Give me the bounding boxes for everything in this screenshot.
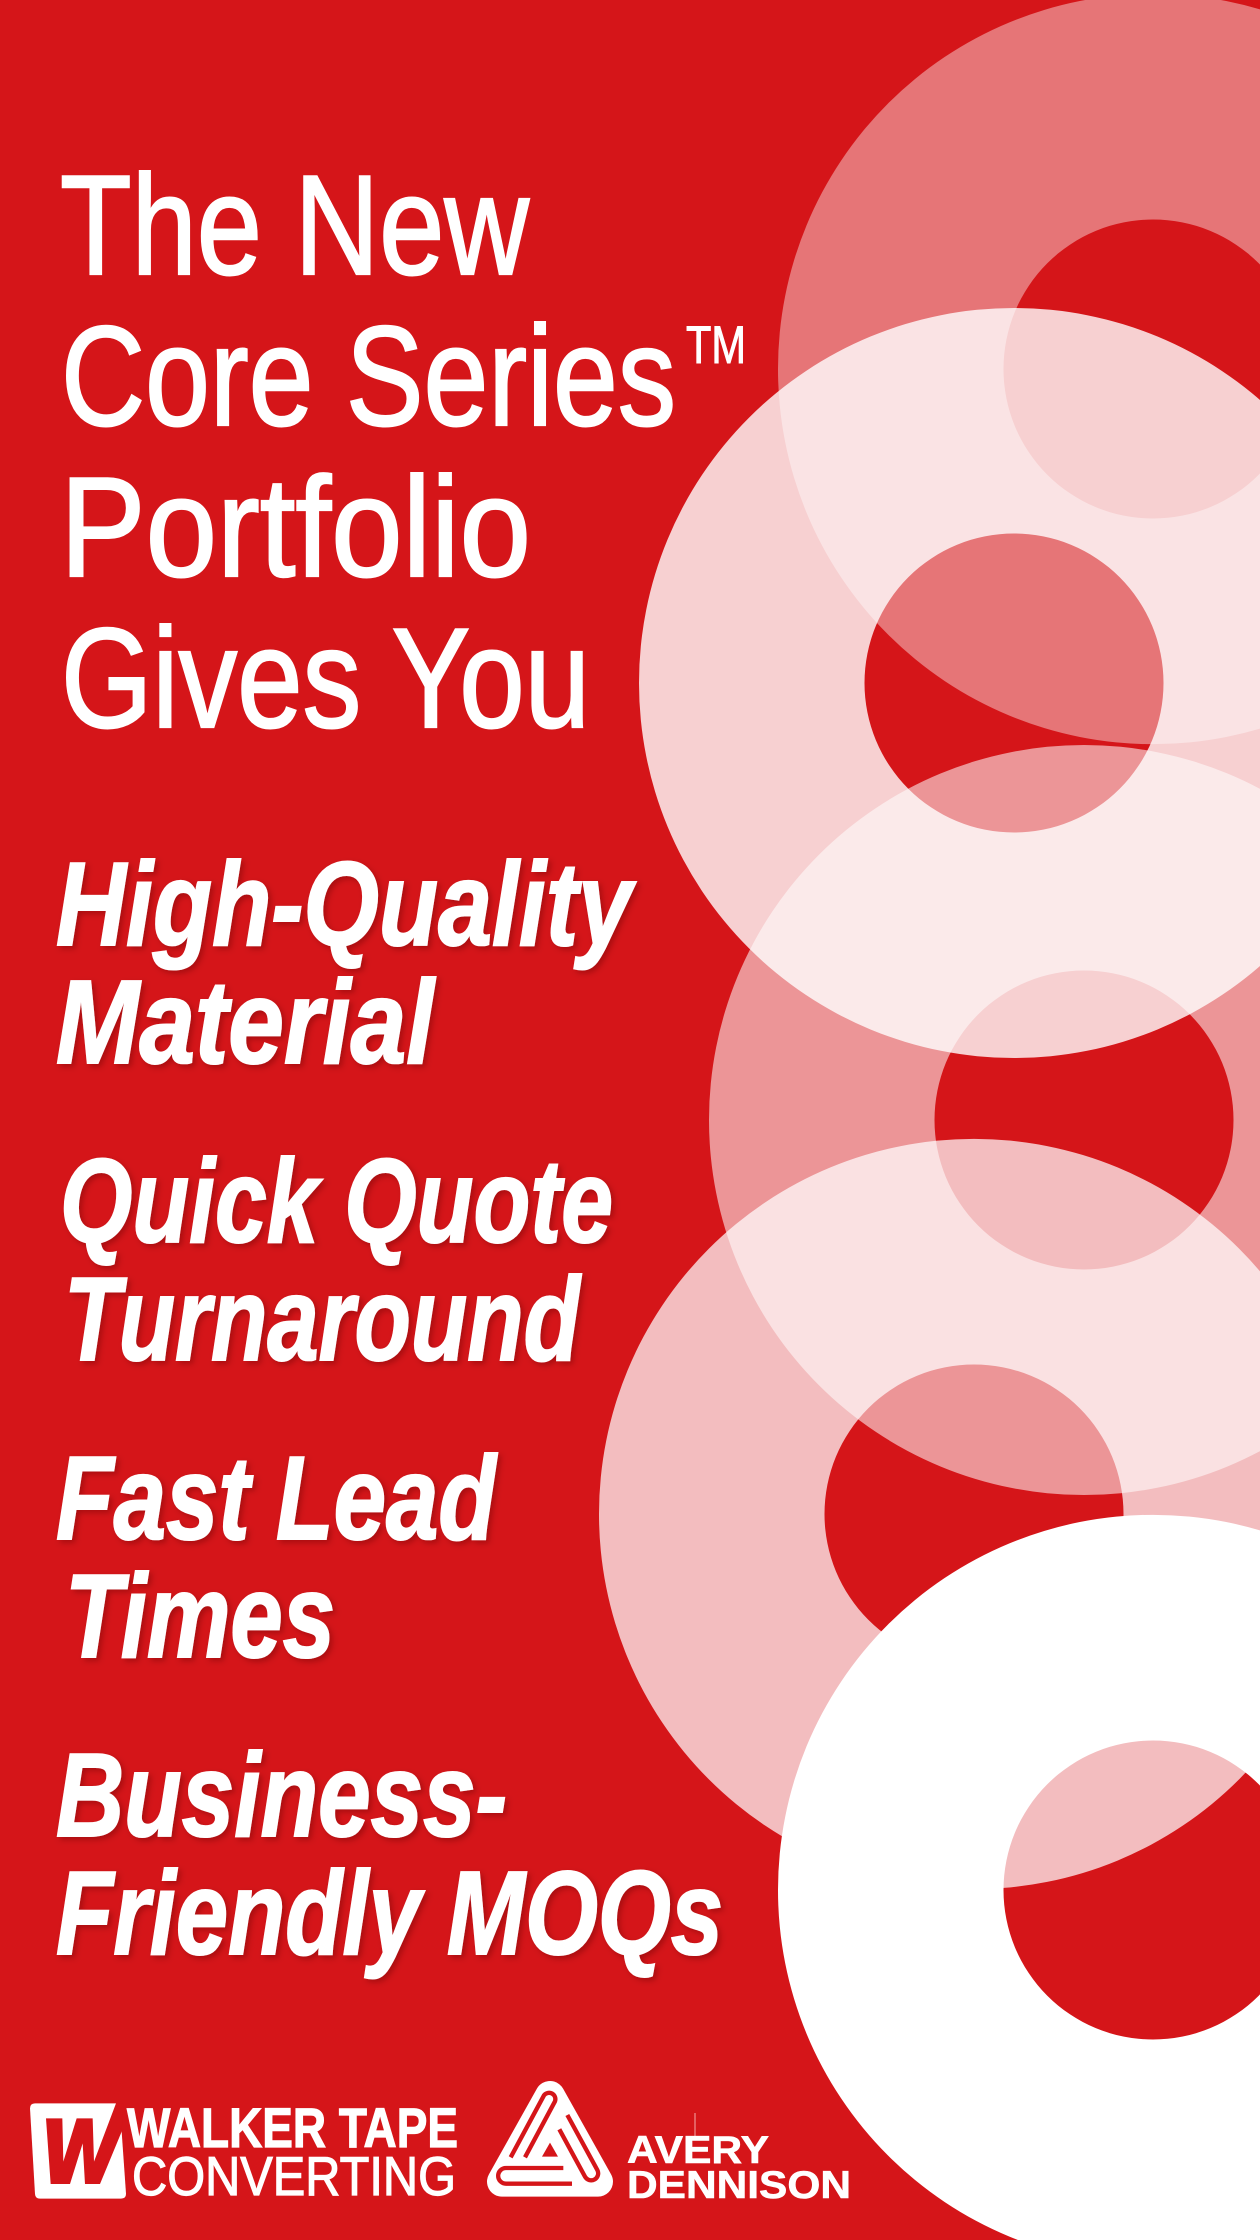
walker tape wordmark: WALKER TAPE xyxy=(127,2096,458,2159)
avery dennison wordmark: DENNISON xyxy=(627,2164,851,2207)
ring 5 xyxy=(778,1515,1260,2240)
benefit: Business-Friendly MOQs: Business- xyxy=(56,1729,507,1862)
benefit: Fast Lead Times: Fast Lead xyxy=(56,1432,498,1565)
ring 1 xyxy=(778,0,1260,744)
benefit: Business-Friendly MOQs: Friendly MOQs xyxy=(56,1847,723,1980)
benefit: High-Quality Material: High-Quality xyxy=(56,838,637,971)
walker tape wordmark xyxy=(127,2096,458,2207)
title: Portfolio xyxy=(60,448,531,607)
logo: Walker Tape Converting xyxy=(30,2096,458,2207)
benefit: Quick Quote Turnaround: Quick Quote xyxy=(60,1135,613,1268)
title: TM xyxy=(686,316,746,375)
ring 3 xyxy=(709,745,1260,1495)
benefit: Fast Lead Times: Times xyxy=(65,1550,335,1683)
benefit: Quick Quote Turnaround: Turnaround xyxy=(64,1253,582,1386)
title xyxy=(60,146,746,758)
icon: Avery triangle mark xyxy=(498,2093,598,2184)
avery dennison wordmark: AVERY xyxy=(627,2129,769,2172)
avery dennison wordmark xyxy=(627,2113,851,2207)
icon: W mark xyxy=(30,2103,126,2199)
logo: Avery Dennison xyxy=(498,2093,851,2207)
benefit: High-Quality Material xyxy=(56,838,637,1089)
circle graphic: stacked translucent rings xyxy=(599,0,1260,2240)
ring 2 xyxy=(639,308,1260,1058)
title: The New xyxy=(60,146,529,305)
benefit: High-Quality Material: Material xyxy=(56,956,436,1089)
walker tape wordmark: CONVERTING xyxy=(132,2145,456,2207)
benefit: Fast Lead Times xyxy=(56,1432,498,1683)
benefit: Business-Friendly MOQs xyxy=(56,1729,723,1980)
title: Gives You xyxy=(61,599,590,758)
title: Core Series xyxy=(61,297,676,456)
benefit: Quick Quote Turnaround xyxy=(60,1135,613,1386)
ring 4 xyxy=(599,1139,1260,1889)
